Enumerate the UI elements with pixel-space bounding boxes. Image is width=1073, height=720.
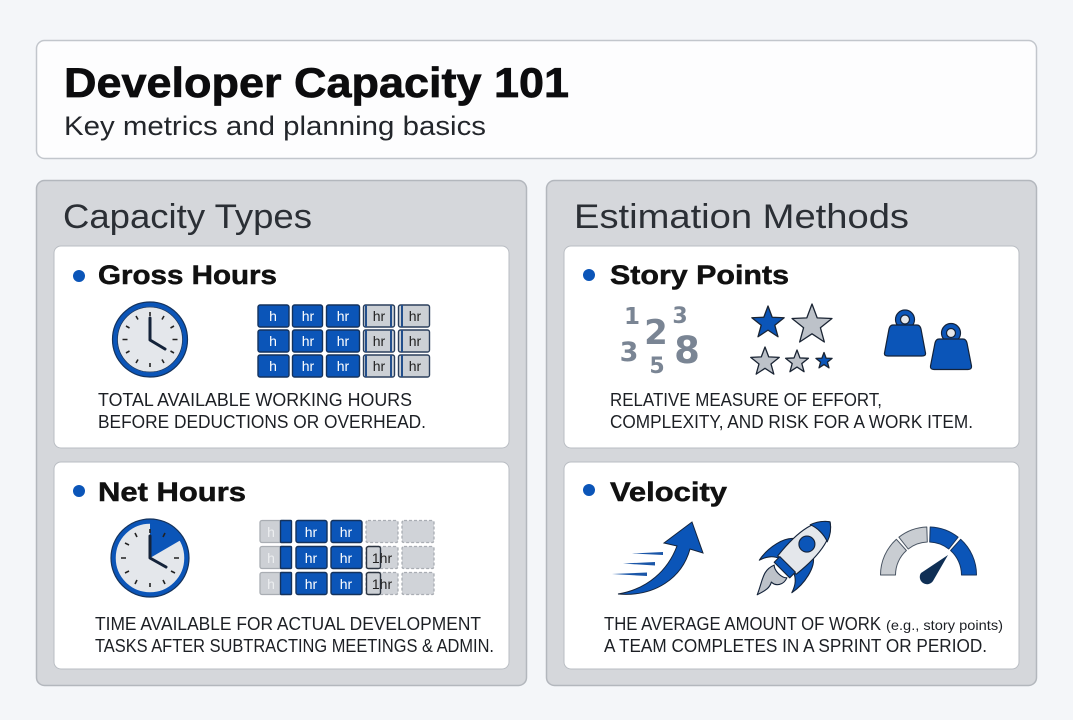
chart: gross hour blocks: h	[269, 308, 277, 324]
heading: net hours: Net Hours	[98, 477, 246, 507]
chart: net hour blocks: hr	[305, 576, 318, 592]
description: gross hours: BEFORE DEDUCTIONS OR OVERHEAD.	[98, 412, 426, 432]
heading: capacity types: Capacity Types	[63, 198, 312, 236]
icon: clock	[112, 302, 188, 377]
icon: scattered numbers: 1	[624, 304, 640, 330]
panel: capacity types	[36, 180, 526, 686]
chart: gross hour blocks: hr	[302, 308, 315, 324]
chart: gross hour blocks: hr	[302, 333, 315, 349]
icon: scattered numbers: 3	[620, 337, 638, 368]
subtitle: Key metrics and planning basics	[64, 111, 486, 141]
heading: estimation methods: Estimation Methods	[574, 198, 909, 236]
chart: net hour blocks: h	[267, 550, 275, 566]
icon: scattered numbers: 5	[649, 354, 665, 379]
icon: weights	[884, 310, 972, 370]
title banner	[36, 40, 1036, 158]
chart: gross hour blocks: hr	[373, 358, 386, 374]
description: velocity	[604, 614, 1003, 656]
card: velocity	[564, 462, 1019, 669]
chart: gross hour blocks: hr	[337, 358, 350, 374]
description: net hours: TASKS AFTER SUBTRACTING MEETINGS & ADMIN.	[95, 636, 494, 656]
chart: gross hour blocks: h	[269, 333, 277, 349]
chart: net hour blocks: h	[267, 576, 275, 592]
heading: gross hours: Gross Hours	[98, 260, 277, 290]
description: story points: COMPLEXITY, AND RISK FOR A WORK ITEM.	[610, 412, 973, 432]
chart: gross hour blocks: hr	[409, 358, 422, 374]
chart: net hour blocks: hr	[340, 550, 353, 566]
description: net hours: TIME AVAILABLE FOR ACTUAL DEVELOPMENT	[95, 614, 481, 634]
icon: scattered numbers: 2	[644, 313, 668, 353]
chart: gross hour blocks: hr	[373, 308, 386, 324]
card: gross hours	[54, 246, 509, 448]
chart: gross hour blocks: hr	[409, 333, 422, 349]
icon: rising arrow	[612, 522, 703, 594]
icon: scattered numbers: 8	[674, 329, 700, 372]
card: story points	[564, 246, 1019, 448]
description: velocity: A TEAM COMPLETES IN A SPRINT OR PERIOD.	[604, 636, 987, 656]
chart: gross hour blocks: hr	[373, 333, 386, 349]
chart: gross hour blocks: hr	[409, 308, 422, 324]
icon: scattered numbers: 3	[672, 304, 688, 329]
chart: gross hour blocks: hr	[302, 358, 315, 374]
chart: net hour blocks: hr	[340, 524, 353, 540]
bullet	[73, 485, 85, 497]
description: velocity: (e.g., story points)	[886, 617, 1003, 633]
chart: gross hour blocks: hr	[337, 333, 350, 349]
heading: story points: Story Points	[610, 260, 789, 290]
description: gross hours	[98, 390, 426, 432]
chart: gross hour blocks: h	[269, 358, 277, 374]
chart: net hour blocks: hr	[340, 576, 353, 592]
bullet	[583, 484, 595, 496]
bullet	[583, 269, 595, 281]
chart: net hour blocks: hr	[305, 524, 318, 540]
chart: net hour blocks: h	[267, 524, 275, 540]
icon: scattered numbers	[620, 304, 700, 379]
icon: gauge	[880, 527, 976, 584]
description: gross hours: TOTAL AVAILABLE WORKING HOURS	[98, 390, 412, 410]
description: net hours	[95, 614, 494, 656]
icon: rocket	[740, 505, 847, 612]
chart: net hour blocks: 1hr	[372, 550, 392, 566]
panel: estimation methods	[546, 180, 1036, 686]
title: Developer Capacity 101	[64, 59, 569, 106]
description: story points: RELATIVE MEASURE OF EFFORT,	[610, 390, 882, 410]
chart: net hour blocks: hr	[305, 550, 318, 566]
description: velocity: THE AVERAGE AMOUNT OF WORK	[604, 614, 881, 634]
icon: stars	[751, 304, 832, 374]
chart: gross hour blocks	[258, 305, 430, 377]
chart: gross hour blocks: hr	[337, 308, 350, 324]
description: story points	[610, 390, 973, 432]
card: net hours	[54, 462, 509, 669]
bullet	[73, 270, 85, 282]
icon: clock with blue wedge	[111, 519, 189, 597]
chart: net hour blocks: 1hr	[372, 576, 392, 592]
chart: net hour blocks	[260, 520, 434, 594]
heading: velocity: Velocity	[610, 477, 727, 507]
